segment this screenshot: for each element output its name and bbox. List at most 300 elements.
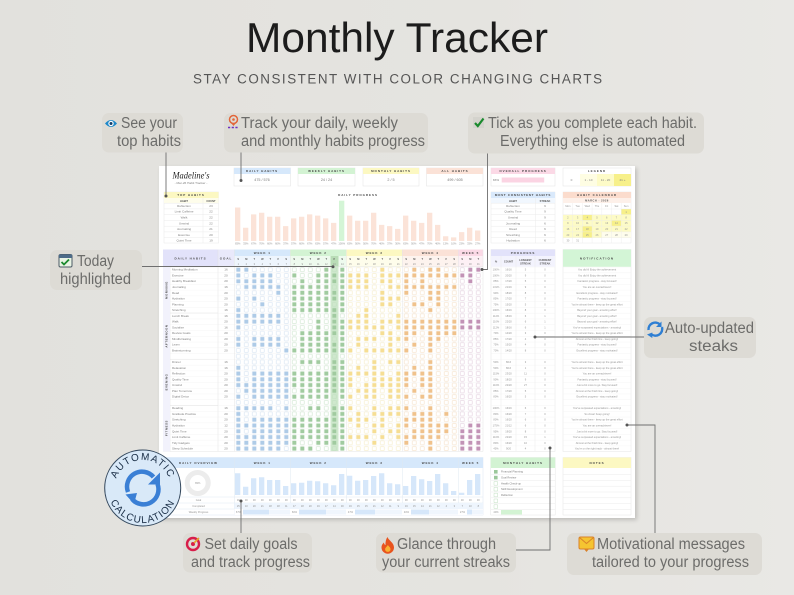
- table: progress: 0: [544, 302, 546, 306]
- table: top habits: Limit Caffeine: [175, 210, 194, 214]
- habit names: Dinner: [172, 360, 181, 364]
- table: progress: 3: [525, 331, 527, 335]
- table: daily habits grid: DAILY HABITS: [174, 256, 207, 260]
- legend: [563, 168, 631, 186]
- habit names: Quality Time: [172, 377, 189, 381]
- KPI: weekly habits: 24 / 24: [321, 178, 332, 182]
- donut chart: [187, 472, 208, 494]
- KPI: weekly habits: WEEKLY HABITS: [308, 169, 345, 173]
- habit names: Unwind: [172, 383, 182, 387]
- panel: monthly habits: 40%: [493, 510, 499, 514]
- table: top habits: HABIT: [180, 199, 188, 203]
- icon: refresh arrows: [126, 472, 160, 504]
- habit names: Healthy Breakfast: [172, 279, 196, 283]
- habit names: Walk: [172, 320, 179, 324]
- table: progress: 27: [524, 383, 527, 387]
- callout: auto-updated streaks: steaks: [689, 338, 738, 355]
- goal values: 20: [224, 441, 228, 445]
- daily goal values: 30: [349, 498, 352, 502]
- habit names: Stretching: [172, 418, 186, 422]
- goal values: 16: [224, 366, 228, 370]
- habit names: Reading: [172, 406, 184, 410]
- table: progress: COUNT: [504, 260, 514, 264]
- chart: daily progress bars: 70%: [427, 241, 433, 245]
- table: top habits: 22: [209, 221, 213, 225]
- calendar: habit calendar: 4: [587, 216, 589, 220]
- table: progress: 0: [544, 418, 546, 422]
- callout: current streaks: [376, 533, 516, 572]
- sheet name heading: Madeline's: [172, 172, 210, 182]
- chart: daily progress bars: 50%: [411, 241, 417, 245]
- calendar: habit calendar: 26: [596, 233, 599, 237]
- panel: monthly habits: Goal Review: [501, 476, 516, 480]
- table: progress: 85%: [493, 389, 499, 393]
- table: progress: 11: [524, 372, 527, 376]
- calendar: habit calendar: 7: [616, 216, 618, 220]
- table: progress: 14/20: [505, 348, 512, 352]
- calendar: habit calendar: 5: [596, 216, 598, 220]
- table: progress: 18/16: [505, 325, 512, 329]
- day numbers: 6: [278, 262, 280, 266]
- table: notification messages: You did it! Enjoy the achievement: [578, 268, 616, 272]
- daily completed values: 15: [365, 504, 368, 508]
- table: progress: 6: [525, 418, 527, 422]
- legend: LEGEND: [588, 169, 606, 173]
- table: progress: 80%: [493, 418, 499, 422]
- table: progress: 100%: [493, 268, 500, 272]
- table: notification messages: You're on the right track - almost there!: [575, 447, 620, 451]
- habit names: Exercise: [172, 274, 184, 278]
- chart: daily progress bars: 47%: [331, 241, 337, 245]
- day numbers: 14: [341, 262, 344, 266]
- calendar: habit calendar: HABIT CALENDAR: [577, 193, 617, 197]
- weekly progress bars: 40%: [404, 510, 410, 514]
- calendar: habit calendar: 17: [576, 227, 580, 231]
- goal values: 16: [224, 406, 228, 410]
- KPI: overall progress: 83%: [493, 178, 499, 182]
- panel: monthly habits: MONTHLY HABITS: [503, 461, 543, 465]
- chart: daily progress bars: 83%: [235, 241, 241, 245]
- day numbers: 3: [254, 262, 256, 266]
- table: progress: 9: [525, 377, 527, 381]
- table: most consistent habits: 6: [544, 233, 546, 237]
- legend: 1 - 10: [585, 178, 593, 182]
- icon: target pin: [228, 116, 239, 128]
- table: most consistent habits: Unwind: [508, 216, 518, 220]
- table: progress: 0: [544, 383, 546, 387]
- table: top habits: Journaling: [177, 227, 191, 231]
- table: progress: 21/12: [505, 424, 512, 428]
- daily goal values: 30: [293, 498, 296, 502]
- habit names: Brainstorming: [172, 348, 191, 352]
- calendar: habit calendar: 29: [625, 233, 628, 237]
- overview row labels: Goal: [196, 498, 202, 502]
- chart: daily progress bars: 57%: [291, 241, 297, 245]
- table: progress: 8: [525, 348, 527, 352]
- habit names: Tidy Gadgets: [172, 441, 190, 445]
- table: notification messages: You're almost there - keep up the great effort: [571, 360, 623, 364]
- daily completed values: 17: [325, 504, 328, 508]
- table: progress: 0: [544, 291, 546, 295]
- daily goal values: 30: [437, 498, 440, 502]
- table: progress: 21/16: [505, 285, 512, 289]
- table: top habits: 23: [209, 204, 213, 208]
- calendar: habit calendar: 10: [576, 221, 580, 225]
- table: progress: 9: [525, 274, 527, 278]
- goal values: 16: [224, 325, 228, 329]
- daily goal values: 30: [405, 498, 408, 502]
- panel: monthly habits: Skill Development: [501, 487, 523, 491]
- table: notification messages: Just a bit more to go. Stay focused!: [577, 429, 618, 433]
- table: top habits: 19: [209, 238, 213, 242]
- table: progress: 70%: [493, 348, 499, 352]
- goal values: 20: [224, 429, 228, 433]
- table: most consistent habits: 6: [544, 221, 546, 225]
- table: progress: 16/20: [505, 418, 512, 422]
- chart: daily progress bars: 37%: [387, 241, 393, 245]
- table: progress: 20/20: [505, 274, 512, 278]
- daily completed values: 21: [261, 504, 264, 508]
- table: progress: %: [495, 260, 498, 264]
- calendar: habit calendar: 23: [566, 233, 570, 237]
- table: notification messages: Beyond your goal - amazing effort!: [577, 314, 617, 318]
- sheet name heading: - Mar-26 Habit Tracker -: [175, 181, 207, 185]
- icon: calendar: [59, 254, 72, 267]
- calendar: habit calendar: 25: [586, 233, 589, 237]
- table: progress: 9/20: [506, 447, 512, 451]
- goal values: 20: [224, 331, 228, 335]
- callout: motivational messages: [567, 533, 762, 575]
- habit names: Gratitude Practice: [172, 412, 196, 416]
- chart: daily progress bars: DAILY PROGRESS: [338, 193, 378, 197]
- chart: daily progress bars: 47%: [419, 241, 425, 245]
- table: progress: 4: [525, 447, 527, 451]
- daily completed values: 12: [437, 504, 440, 508]
- legend: 0: [571, 178, 573, 182]
- chart: daily progress bars: 33%: [243, 241, 249, 245]
- table: daily habits grid: GOAL: [220, 256, 232, 260]
- callout: daily goals: and track progress: [191, 554, 310, 571]
- daily completed values: 20: [309, 504, 312, 508]
- callout: daily goals: Set daily goals: [204, 536, 298, 553]
- daily goal values: 30: [429, 498, 432, 502]
- daily completed values: 21: [373, 504, 376, 508]
- daily goal values: 30: [253, 498, 256, 502]
- table: notification messages: Almost at the finish line - keep going!: [576, 337, 618, 341]
- callout: today highlighted: highlighted: [60, 271, 131, 288]
- table: progress: 16/20: [505, 395, 512, 399]
- day numbers: 18: [373, 262, 376, 266]
- legend: 21 +: [619, 178, 626, 182]
- chart: daily progress bars: 40%: [435, 241, 441, 245]
- table: progress: 90%: [493, 377, 499, 381]
- day numbers: 4: [262, 262, 264, 266]
- table: most consistent habits: [491, 192, 555, 243]
- table: progress: 85%: [493, 296, 499, 300]
- daily goal values: 30: [469, 498, 472, 502]
- panel: tracker sheet: [159, 166, 635, 518]
- table: progress: 6: [525, 424, 527, 428]
- chart: daily progress bars: 27%: [475, 241, 481, 245]
- icon: check mark: [473, 117, 484, 128]
- daily completed values: 12: [381, 504, 384, 508]
- table: progress: 80%: [493, 412, 499, 416]
- table: progress: 110%: [493, 435, 500, 439]
- goal values: 16: [224, 314, 228, 318]
- icon: envelope: [579, 537, 594, 552]
- habit names: Morning Meditation: [172, 268, 198, 272]
- day numbers: 16: [357, 262, 360, 266]
- table: notification messages: Fantastic progress - stay focused!: [578, 279, 617, 283]
- table: notification messages: You are an overachiever!: [583, 285, 612, 289]
- table: progress: STREAK: [540, 261, 550, 265]
- table: progress: 75%: [493, 302, 499, 306]
- table: notification messages: So close! Keep going!: [584, 412, 610, 416]
- calendar: habit calendar: 13: [605, 221, 609, 225]
- arrow: tick leader: [480, 154, 488, 271]
- calendar: habit calendar: [563, 192, 631, 243]
- daily completed values: 30: [341, 504, 344, 508]
- table: progress: 0: [544, 441, 546, 445]
- goal values: 12: [224, 424, 228, 428]
- table: notification messages: NOTIFICATION: [580, 256, 614, 260]
- chart: daily progress bars: 13%: [443, 241, 449, 245]
- panel: monthly habits: [491, 458, 555, 515]
- table: progress: 16/16: [505, 268, 512, 272]
- ticked checkboxes: [236, 270, 480, 449]
- goal values: 20: [224, 377, 228, 381]
- chart: daily progress bars: 50%: [355, 241, 361, 245]
- table: progress: 5: [525, 279, 527, 283]
- habit names: Mindful Eating: [172, 337, 191, 341]
- donut chart: 83%: [195, 481, 201, 485]
- day numbers: 25: [429, 262, 432, 266]
- table: progress: 80%: [493, 441, 499, 445]
- table: notification messages: Excellent progress - stay motivated!: [576, 348, 618, 352]
- table: daily habits grid: WEEK 3: [366, 251, 383, 255]
- calendar: habit calendar: 27: [605, 233, 609, 237]
- daily completed values: 11: [285, 504, 288, 508]
- daily goal values: 30: [477, 498, 480, 502]
- table: most consistent habits: Stretching: [506, 233, 520, 237]
- table: progress: 0: [544, 285, 546, 289]
- daily completed values: 21: [429, 504, 432, 508]
- daily goal values: 30: [301, 498, 304, 502]
- table: top habits: COUNT: [206, 199, 216, 203]
- day numbers: 11: [317, 262, 320, 266]
- goal values: 16: [224, 360, 228, 364]
- goal values: 20: [224, 291, 228, 295]
- table: progress: 85%: [493, 279, 499, 283]
- callout: see your top habits: [102, 113, 183, 152]
- daily completed values: 25: [237, 504, 240, 508]
- calendar: habit calendar: 19: [596, 227, 599, 231]
- table: notification messages: You've surpassed expectations - amazing!: [573, 325, 621, 329]
- daily goal values: 30: [285, 498, 288, 502]
- icon: refresh: [647, 322, 662, 338]
- table: progress: 1: [544, 325, 546, 329]
- day numbers: 19: [381, 262, 384, 266]
- callout: motivational messages: tailored to your progress: [592, 554, 749, 571]
- table: top habits: Walk: [181, 216, 188, 220]
- chart: daily progress bars: 60%: [275, 241, 281, 245]
- table: progress: 6: [525, 314, 527, 318]
- chart: daily progress bars: 10%: [451, 241, 457, 245]
- calendar: habit calendar: 3: [577, 216, 579, 220]
- table: progress: 4: [525, 337, 527, 341]
- table: progress: 0: [544, 377, 546, 381]
- day numbers: 5: [270, 262, 272, 266]
- table: progress: 17/20: [505, 279, 512, 283]
- table: top habits: 22: [209, 210, 213, 214]
- table: progress: 1: [544, 320, 546, 324]
- table: progress: 0: [544, 424, 546, 428]
- daily goal values: 30: [445, 498, 448, 502]
- daily completed values: 3: [454, 504, 456, 508]
- table: most consistent habits: Read: [509, 227, 517, 231]
- calendar: habit calendar: 14: [615, 221, 618, 225]
- daily goal values: 30: [277, 498, 280, 502]
- table: progress: 23/20: [505, 372, 512, 376]
- daily completed values: 8: [478, 504, 480, 508]
- daily completed values: 20: [253, 504, 256, 508]
- chart: daily progress bars: 37%: [283, 241, 289, 245]
- table: notification messages: Almost at the finish line - keep going!: [576, 389, 618, 393]
- daily completed values: 19: [317, 504, 320, 508]
- table: daily habits grid: [163, 250, 483, 452]
- table: progress: 0: [544, 348, 546, 352]
- table: notification messages: Excellent progress - stay motivated!: [576, 291, 618, 295]
- calendar: habit calendar: MARCH - 2026: [585, 199, 609, 203]
- panel: notes: [563, 458, 631, 515]
- goal values: 20: [224, 435, 228, 439]
- daily goal values: 30: [397, 498, 400, 502]
- callout: see your top habits: top habits: [117, 133, 181, 150]
- KPI: monthly habits: MONTHLY HABITS: [371, 169, 411, 173]
- empty checkboxes: [234, 267, 290, 451]
- goal values: 20: [224, 279, 228, 283]
- table: progress: 0: [544, 447, 546, 451]
- habit names: Limit Caffeine: [172, 435, 191, 439]
- daily goal values: 30: [413, 498, 416, 502]
- day numbers: 10: [309, 262, 312, 266]
- table: progress: CURRENT: [539, 258, 552, 262]
- table: progress: 22/20: [505, 320, 512, 324]
- calendar: habit calendar: 31: [576, 238, 580, 242]
- weekly progress bars: [234, 509, 483, 515]
- daily goal values: 30: [373, 498, 376, 502]
- table: progress: 50%: [493, 360, 499, 364]
- day numbers: 28: [453, 262, 456, 266]
- table: progress: 10: [524, 441, 527, 445]
- table: progress: 17/20: [505, 337, 512, 341]
- table: progress: 0: [544, 406, 546, 410]
- habit names: Learn: [172, 343, 180, 347]
- daily goal values: 30: [269, 498, 272, 502]
- badge: automatic calculation: CALCULATION: [112, 500, 174, 524]
- table: progress: 5: [525, 268, 527, 272]
- table: notification messages: [563, 250, 631, 452]
- table: progress: 0: [544, 366, 546, 370]
- goal values: 16: [224, 285, 228, 289]
- table: most consistent habits: MOST CONSISTENT HABITS: [495, 193, 551, 197]
- table: progress: 100%: [493, 274, 500, 278]
- table: progress: 45%: [493, 447, 499, 451]
- day numbers: 30: [469, 262, 472, 266]
- table: progress: 131%: [493, 285, 500, 289]
- calendar: habit calendar: 30: [566, 238, 570, 242]
- table: progress: 115%: [493, 372, 500, 376]
- goal values: 20: [224, 418, 228, 422]
- table: progress: 110%: [493, 320, 500, 324]
- daily completed values: 19: [349, 504, 352, 508]
- table: top habits: Exercise: [178, 233, 190, 237]
- callout: current streaks: Glance through: [397, 536, 496, 553]
- table: daily habits grid: FITNESS: [164, 420, 168, 436]
- weekly progress bars: 47%: [348, 510, 354, 514]
- panel: daily overview: WEEK 4: [422, 461, 439, 465]
- table: progress: PROGRESS: [511, 251, 535, 255]
- chart: daily progress bars: 67%: [307, 241, 313, 245]
- calendar: habit calendar: Fri: [605, 204, 609, 208]
- section labels: MORNING: [164, 281, 168, 299]
- callout: auto-updated streaks: [644, 317, 756, 358]
- goal values: 16: [224, 308, 228, 312]
- table: progress: 0: [544, 268, 546, 272]
- panel: monthly habits: Health Check-up: [501, 481, 522, 485]
- table: notification messages: You've surpassed expectations - amazing!: [573, 435, 621, 439]
- habit names: Sleep Schedule: [172, 447, 193, 451]
- habit names: Digital Detox: [172, 395, 190, 399]
- habit names: Read: [172, 291, 180, 295]
- overview row labels: Weekly Progress: [189, 510, 209, 514]
- table: progress: 18/16: [505, 314, 512, 318]
- table: daily habits grid: WEEK 2: [310, 251, 327, 255]
- chart: daily progress bars: 63%: [403, 241, 409, 245]
- table: notification messages: Fantastic progress - stay focused!: [578, 377, 617, 381]
- daily goal values: 30: [317, 498, 320, 502]
- daily goal values: 30: [261, 498, 264, 502]
- table: progress: 8: [525, 429, 527, 433]
- habit names: Relaxation: [172, 366, 187, 370]
- table: daily habits grid: AFTERNOON: [164, 324, 168, 348]
- calendar: habit calendar: 1: [625, 210, 627, 214]
- table: top habits: [164, 192, 218, 243]
- callout: tick as you complete: Everything else is automated: [500, 133, 685, 150]
- callout: tick as you complete: Tick as you complete each habit.: [488, 115, 697, 132]
- callout: current streaks: your current streaks: [382, 554, 510, 571]
- table: notification messages: Excellent progress - stay motivated!: [576, 395, 618, 399]
- table: progress: 5: [525, 395, 527, 399]
- daily goal values: 30: [461, 498, 464, 502]
- table: progress: 85%: [493, 337, 499, 341]
- table: progress: 1: [525, 366, 527, 370]
- overview row labels: Completed: [192, 504, 205, 508]
- chart: daily progress bars: 33%: [467, 241, 473, 245]
- table: top habits: 22: [209, 216, 213, 220]
- table: most consistent habits: 6: [544, 238, 546, 242]
- goal values: 20: [224, 337, 228, 341]
- table: top habits: TOP HABITS: [177, 193, 205, 197]
- chart: daily progress bars: 70%: [371, 241, 377, 245]
- calendar: habit calendar: 16: [566, 227, 570, 231]
- callout: daily goals: [183, 533, 312, 572]
- daily goal values: 30: [237, 498, 240, 502]
- daily goal values: 30: [333, 498, 336, 502]
- daily goal values: 30: [357, 498, 360, 502]
- day numbers: 27: [445, 262, 448, 266]
- daily completed values: 10: [245, 504, 248, 508]
